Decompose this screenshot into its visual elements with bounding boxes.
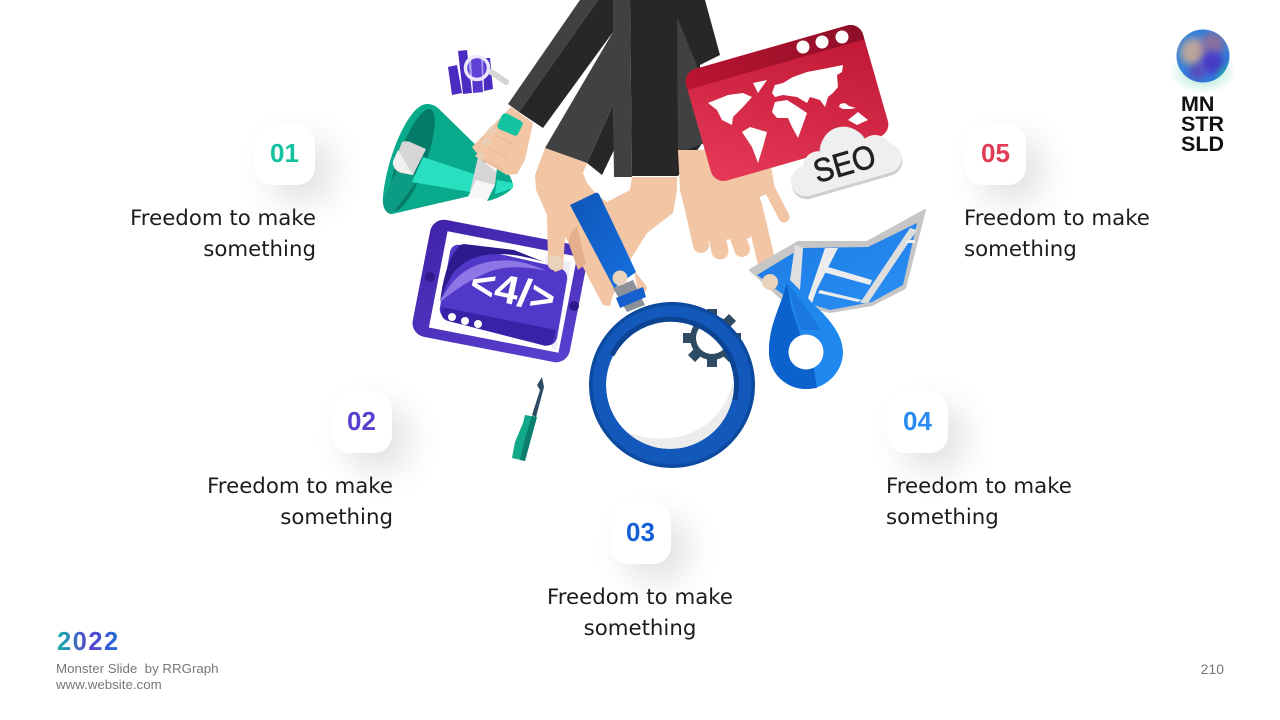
window dots [796, 30, 848, 54]
tablet side holes [425, 272, 579, 311]
footer credit: Monster Slide by RRGraph www.website.com [56, 661, 219, 692]
magnifier handle [570, 193, 646, 312]
item 02 [207, 402, 416, 530]
icon: megaphone [380, 104, 513, 216]
logo wordmark: MN [1181, 92, 1214, 116]
badge 03: 03 [626, 517, 655, 547]
badge 01 [254, 124, 315, 185]
icon: magnifying glass [570, 193, 755, 468]
icon: folded blue map [750, 210, 925, 312]
text 05: something [964, 237, 1077, 262]
hand holding megaphone [472, 107, 533, 175]
text 01: something [203, 237, 316, 262]
text 03: something [584, 616, 696, 641]
badge 01: 01 [270, 138, 299, 168]
world map continents [708, 65, 868, 163]
text 02 [207, 474, 393, 530]
right fingertip nail [762, 274, 778, 290]
icon: location pin [769, 283, 843, 389]
lens [606, 321, 734, 449]
icon: purple code tablet: <4/> [466, 261, 559, 322]
icon: purple code tablet [410, 217, 590, 365]
right hand with pointing finger [678, 150, 784, 281]
icon: SEO cloud: SEO [809, 137, 880, 190]
item 01 [130, 134, 338, 262]
text 01 [130, 206, 316, 262]
logo wordmark: SLD [1181, 132, 1224, 156]
tablet buttons [448, 313, 482, 328]
icon: screwdriver [512, 377, 544, 461]
page number: 210 [1201, 661, 1224, 677]
item 03 [547, 514, 733, 641]
text 04 [886, 474, 1072, 530]
fingernail on tablet [548, 256, 562, 270]
logo sphere [1169, 30, 1237, 94]
logo wordmark [1181, 92, 1224, 156]
text 03: Freedom to make [547, 585, 733, 610]
text 02: something [280, 505, 393, 530]
gear [683, 309, 741, 367]
text 04: something [886, 505, 999, 530]
badge 04: 04 [903, 406, 932, 436]
text 05: Freedom to make [964, 206, 1150, 231]
badge 02 [331, 392, 392, 453]
icon: SEO cloud [780, 113, 906, 203]
item 04 [886, 402, 1072, 530]
badge 02: 02 [347, 406, 376, 436]
badge 03 [610, 503, 671, 564]
text 01: Freedom to make [130, 206, 316, 231]
item 05 [964, 134, 1150, 262]
logo wordmark: STR [1181, 112, 1224, 136]
text 04: Freedom to make [886, 474, 1072, 499]
text 03 [547, 585, 733, 641]
badge 05 [965, 124, 1026, 185]
icon: red SEO browser window with world map [683, 22, 891, 184]
text 05 [964, 206, 1150, 262]
magnifier ring [589, 302, 755, 468]
badge 04 [887, 392, 948, 453]
left hand holding magnifier [535, 148, 677, 306]
suit jacket and sleeves [508, 0, 720, 177]
central illustration [382, 0, 1234, 468]
badge 05: 05 [981, 138, 1010, 168]
footer year: 2022 [57, 628, 120, 656]
icon: bar chart with magnifier [448, 50, 506, 95]
text 02: Freedom to make [207, 474, 393, 499]
